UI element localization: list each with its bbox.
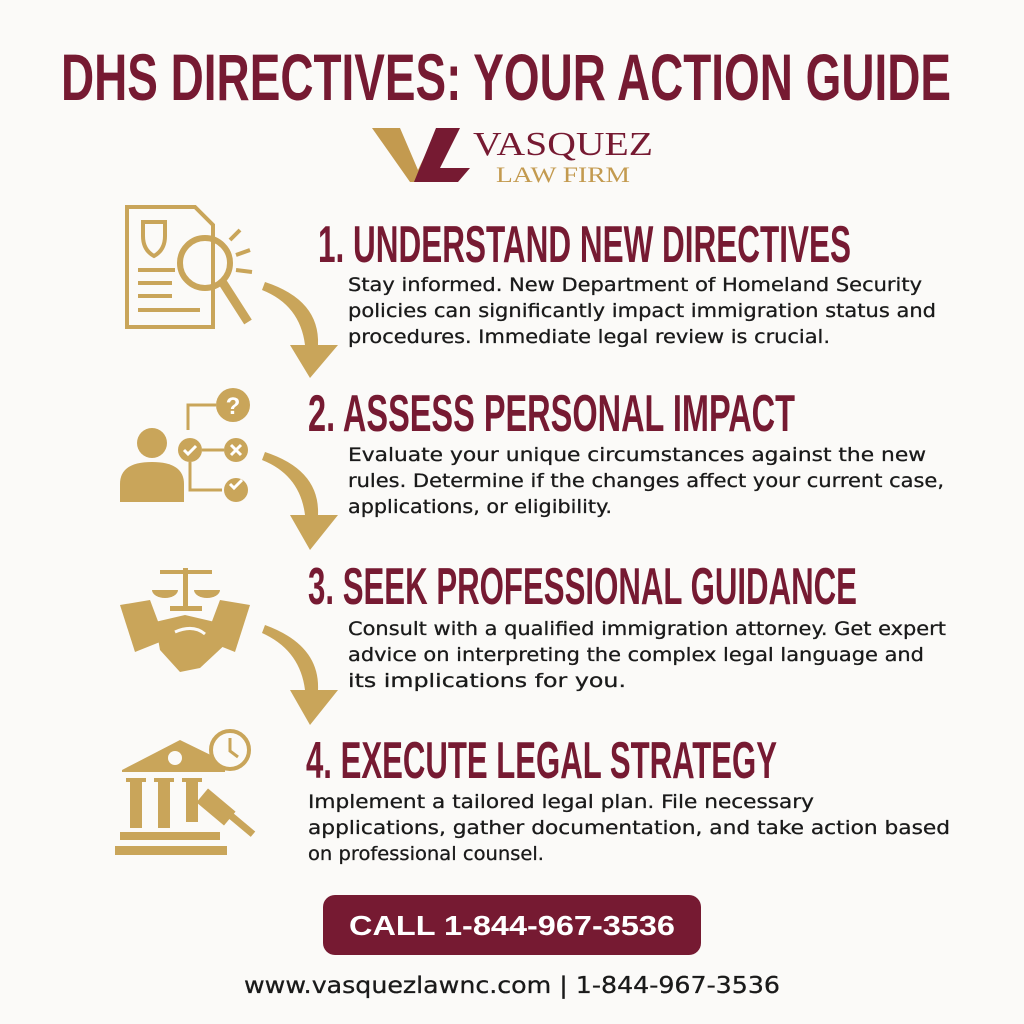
arrow 2 [262,452,338,550]
step 2: rules. Determine if the changes affect your current case, [348,470,944,492]
logo mark [372,128,470,182]
step 2: Evaluate your unique circumstances against the new [348,444,926,466]
step 3 [308,558,946,692]
step 2 [308,385,944,518]
step 4: on professional counsel. [308,843,544,865]
logo text [473,126,653,187]
step 4: Implement a tailored legal plan. File necessary [308,791,814,813]
step 1 [318,216,936,348]
step 4 [306,732,950,865]
call button [323,895,701,955]
step 3: its implications for you. [348,670,626,692]
step 3: Consult with a qualified immigration attorney. Get expert [348,618,946,640]
step 2: applications, or eligibility. [348,496,612,518]
step 4: applications, gather documentation, and take action based [308,817,950,839]
call button: CALL 1-844-967-3536 [349,910,675,941]
arrow 1 [262,282,338,378]
icon: person decision: ? [226,393,240,420]
step 1: Stay informed. New Department of Homeland Security [348,274,922,296]
icon: courthouse gavel [115,731,255,855]
step 1: procedures. Immediate legal review is crucial. [348,326,830,348]
logo text: VASQUEZ [473,126,653,163]
icon: scales handshake [120,568,250,672]
arrow 3 [262,625,338,725]
step 1: policies can significantly impact immigration status and [348,300,936,322]
footer: www.vasquezlawnc.com | 1-844-967-3536 [244,973,780,999]
logo text: LAW FIRM [496,162,630,187]
logo [372,126,653,187]
icon: person decision [120,388,250,502]
icon: document magnifier [127,207,252,327]
step 3: advice on interpreting the complex legal language and [348,644,924,666]
